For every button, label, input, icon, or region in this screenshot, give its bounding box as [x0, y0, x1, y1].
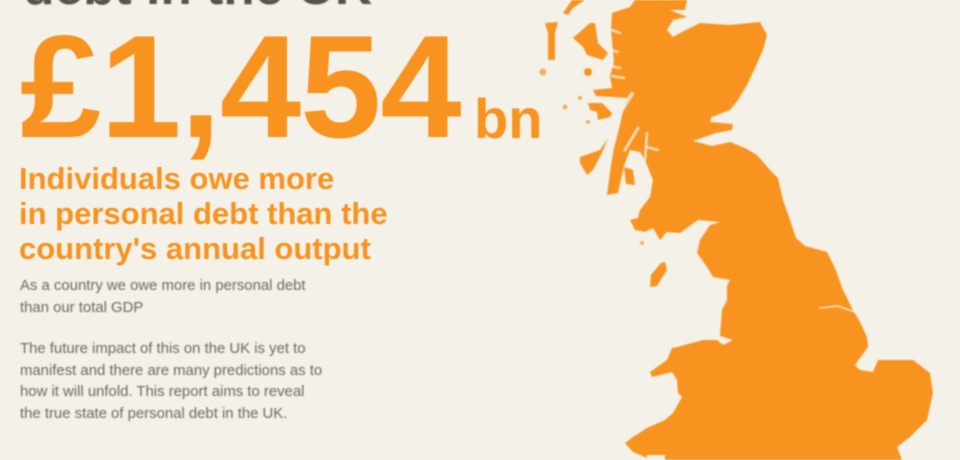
- subheading: country's annual output: [19, 231, 371, 266]
- subheading: in personal debt than the: [19, 196, 388, 231]
- island: Skye: [573, 23, 608, 60]
- island: Tiree: [584, 68, 592, 76]
- text block: GDP comparison: As a country we owe more in personal debt: [20, 278, 306, 294]
- subheading: [19, 161, 388, 266]
- text block: report aim: the true state of personal debt in the UK.: [20, 406, 287, 422]
- text block: GDP comparison: than our total GDP: [20, 300, 143, 316]
- island: Mull: [588, 103, 612, 120]
- text block: report aim: manifest and there are many predictions as to: [20, 363, 322, 379]
- mainland Great Britain: [593, 0, 933, 460]
- island: Islay: [580, 138, 608, 175]
- island: Barra: [540, 68, 546, 76]
- text block: report aim: [20, 341, 322, 422]
- small islets: [562, 96, 644, 245]
- island: Arran: [624, 167, 635, 185]
- unit: bn: [474, 87, 542, 150]
- big figure: £1,454: [20, 5, 461, 168]
- sea lochs and estuaries: [610, 30, 855, 312]
- text block: GDP comparison: [20, 278, 306, 316]
- island: Lewis: [563, 0, 585, 15]
- text block: report aim: how it will unfold. This report aims to reveal: [20, 384, 304, 400]
- island: North Uist: [545, 22, 558, 60]
- text block: report aim: The future impact of this on the UK is yet to: [20, 341, 306, 357]
- island: Isle of Man: [650, 262, 667, 287]
- subheading: Individuals owe more: [19, 161, 334, 196]
